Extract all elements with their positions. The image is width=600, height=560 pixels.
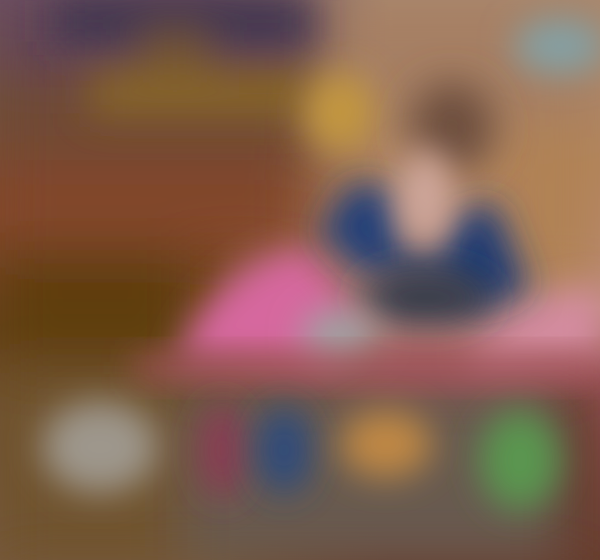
green option: [480, 410, 560, 510]
figure: dark lower body: [359, 270, 491, 326]
pink table right: [465, 288, 600, 364]
yellow badge: [304, 72, 376, 152]
pink table left: [178, 250, 360, 364]
pale blue label: [514, 18, 600, 74]
heading band: [55, 0, 315, 114]
magenta option: [200, 402, 244, 498]
figure: face: [397, 149, 453, 245]
white-grey option: [42, 401, 158, 493]
orange option: [340, 410, 432, 478]
table edge band: [135, 356, 600, 380]
grey object on table: [302, 309, 378, 361]
figure: hair: [410, 82, 494, 174]
figure: blue clothing: [318, 182, 530, 312]
blue option: [256, 406, 312, 494]
